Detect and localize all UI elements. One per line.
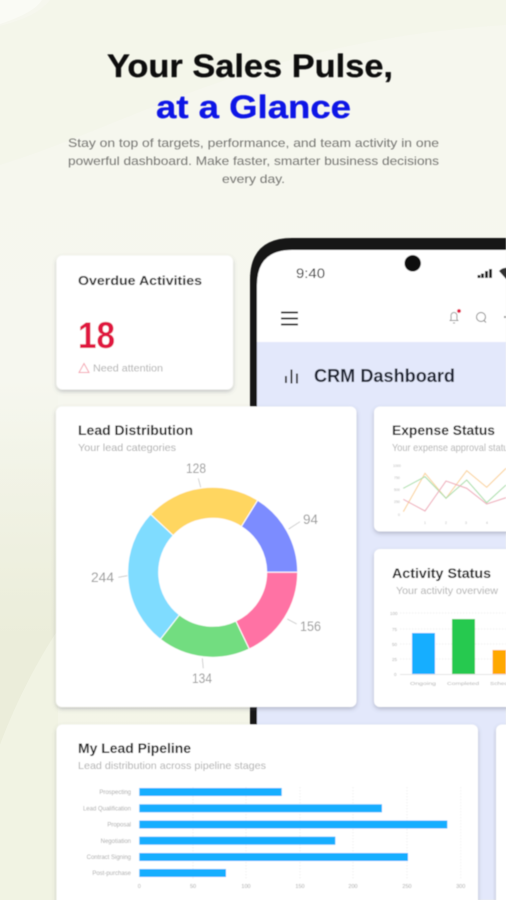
- phone screen header: [257, 250, 506, 342]
- heading: Expense Status: [392, 423, 495, 438]
- panel: activity status: [374, 549, 506, 707]
- horizontal bar chart: [139, 788, 447, 877]
- donut labels: 134: [192, 671, 212, 686]
- category labels: Post-purchase: [92, 871, 132, 877]
- value axis labels: 100: [241, 884, 251, 890]
- subheading: Your activity overview: [396, 585, 498, 597]
- category labels: Proposal: [107, 822, 131, 828]
- dashboard heading: CRM Dashboard: [314, 366, 455, 386]
- subheading: Your lead categories: [78, 442, 176, 454]
- icon: profile: [504, 316, 506, 318]
- title: [107, 48, 393, 125]
- value axis labels: [138, 884, 465, 890]
- axis labels: 750: [394, 476, 400, 480]
- phone frame: [250, 238, 506, 900]
- axis labels: [390, 611, 506, 686]
- value axis labels: 200: [348, 884, 358, 890]
- grid lines: [193, 787, 461, 880]
- category labels: Negotiation: [101, 839, 131, 845]
- panel: cropped card: [496, 724, 506, 900]
- subheading: Lead distribution across pipeline stages: [78, 760, 266, 772]
- camera hole: [404, 255, 421, 272]
- value axis labels: 0: [138, 884, 141, 890]
- note: Need attention: [93, 364, 163, 374]
- heading: My Lead Pipeline: [78, 741, 192, 756]
- status time: 9:40: [296, 266, 325, 281]
- heading: Activity Status: [392, 566, 491, 581]
- phone screen body: [257, 342, 506, 900]
- title: Your Sales Pulse,: [107, 48, 393, 84]
- axis labels: Completed: [447, 681, 480, 686]
- subtitle text: powerful dashboard. Make faster, smarter business decisions: [68, 154, 439, 168]
- donut labels: 128: [186, 461, 206, 476]
- heading: Overdue Activities: [78, 273, 202, 288]
- value: 18: [78, 315, 115, 356]
- value axis labels: 50: [190, 884, 196, 890]
- axis labels: 0: [394, 672, 397, 677]
- category labels: Lead Qualification: [83, 806, 131, 812]
- axis labels: 1: [424, 521, 426, 525]
- category labels: Contract Signing: [87, 855, 131, 861]
- axis labels: 4: [486, 521, 488, 525]
- icon: menu: [281, 312, 298, 326]
- axis labels: 75: [392, 627, 398, 632]
- panel: lead distribution: [56, 406, 356, 707]
- donut chart: [128, 487, 298, 657]
- axis labels: 3: [465, 521, 467, 525]
- value axis labels: 300: [456, 884, 465, 890]
- axis labels: 500: [394, 488, 400, 492]
- phone mockup: [250, 238, 506, 900]
- value axis labels: 250: [402, 884, 412, 890]
- icon: signal: [478, 269, 492, 278]
- line chart: [403, 468, 506, 512]
- panel: my lead pipeline: [56, 724, 478, 900]
- icon: bell: [450, 309, 461, 323]
- axis labels: 250: [394, 500, 400, 504]
- subtitle text: every day.: [222, 172, 285, 186]
- axis labels: 2: [445, 521, 447, 525]
- panel: overdue activities: [56, 256, 233, 390]
- category labels: [83, 790, 132, 877]
- icon: chart: [285, 370, 298, 384]
- value axis labels: 150: [295, 884, 305, 890]
- donut labels: 156: [300, 619, 321, 634]
- donut labels: 244: [91, 570, 114, 585]
- heading: Lead Distribution: [78, 423, 193, 438]
- icon: wifi: [499, 268, 506, 279]
- axis labels: 100: [390, 611, 398, 616]
- subtitle text: [68, 136, 439, 186]
- title: at a Glance: [156, 89, 351, 125]
- bar chart: [400, 613, 506, 674]
- icon: warning: [79, 364, 89, 372]
- donut labels: [91, 461, 321, 686]
- axis labels: 0: [398, 513, 400, 517]
- axis labels: [393, 464, 488, 525]
- icon: search: [476, 312, 486, 322]
- category labels: Prospecting: [99, 790, 131, 796]
- donut labels: 94: [303, 512, 318, 527]
- axis labels: Ongoing: [410, 681, 437, 686]
- axis labels: 50: [392, 642, 398, 647]
- axis labels: 1000: [393, 464, 401, 468]
- axis labels: 25: [392, 657, 398, 662]
- donut leader lines: [118, 478, 300, 668]
- panel: expense status: [374, 406, 506, 532]
- subtitle text: Stay on top of targets, performance, and team activity in one: [68, 136, 439, 150]
